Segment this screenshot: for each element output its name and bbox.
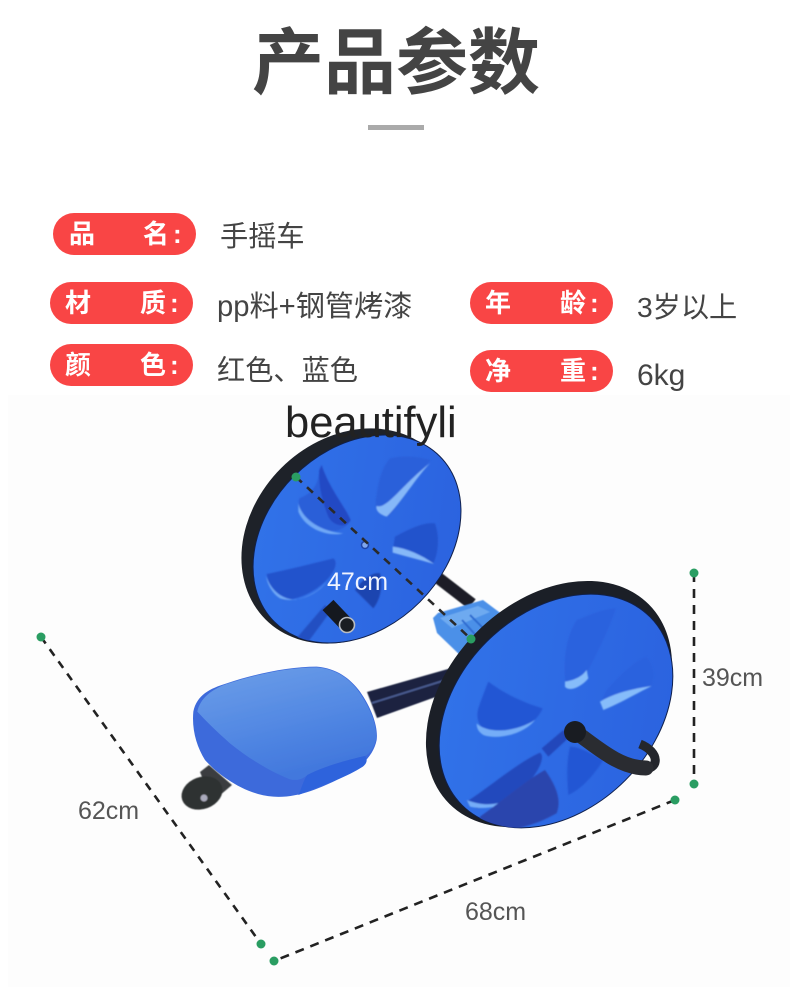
value: age: 3岁以上 xyxy=(637,291,737,323)
value: material: pp料+钢管烤漆 xyxy=(217,291,412,323)
dimension label: 47cm: 47cm xyxy=(327,568,388,596)
label pill: age xyxy=(470,282,613,324)
label pill: colour: : xyxy=(170,350,179,380)
watermark brand text: beautifyli xyxy=(285,399,457,447)
label pill: product name xyxy=(53,213,196,255)
axle and frame bars xyxy=(367,577,472,718)
label pill: material: : xyxy=(170,288,179,318)
value: product name: 手摇车 xyxy=(220,220,305,252)
seat top surface xyxy=(197,667,376,780)
seat front lip xyxy=(298,756,367,795)
label pill: net weight: 净 xyxy=(485,356,511,386)
title underline bar xyxy=(368,125,424,130)
label pill: net weight: : xyxy=(590,356,599,386)
label pill: colour xyxy=(50,344,193,386)
dimension line: width xyxy=(270,796,680,966)
seat body xyxy=(193,667,377,797)
wheel rim xyxy=(198,385,500,687)
crank stub on rear wheel xyxy=(328,605,354,632)
front wheel xyxy=(426,581,674,828)
wheel face xyxy=(393,548,719,874)
title: 产品参数 xyxy=(252,24,540,104)
rear caster wheel xyxy=(177,765,232,815)
hand crank xyxy=(564,721,655,769)
wheel recesses xyxy=(266,457,438,642)
hub xyxy=(362,542,368,548)
label pill: age: 龄 xyxy=(560,288,586,318)
footrest pedal xyxy=(433,600,503,658)
dimension label: 62cm: 62cm xyxy=(78,797,139,825)
value: net weight: 6kg xyxy=(637,359,685,392)
dimension line: height xyxy=(690,568,698,788)
photo background panel xyxy=(8,395,790,987)
label pill: material: 材 xyxy=(65,288,91,318)
dimension label: 39cm: 39cm xyxy=(702,664,763,692)
label pill: net weight xyxy=(470,350,613,392)
dimension line: wheel diameter xyxy=(292,472,476,644)
label pill: colour: 色 xyxy=(140,350,166,380)
product illustration: hand-cranked cart xyxy=(36,428,698,966)
wheel face xyxy=(211,393,503,685)
label pill: product name: 名 xyxy=(143,219,169,249)
wheel rim xyxy=(377,532,721,876)
label pill: material: 质 xyxy=(140,288,166,318)
label pill: colour: 颜 xyxy=(65,350,91,380)
wheel recesses xyxy=(467,608,654,832)
dimension label: 68cm: 68cm xyxy=(465,898,526,926)
dimension line: length xyxy=(36,632,266,948)
seat xyxy=(193,667,377,797)
label pill: material xyxy=(50,282,193,324)
value: colour: 红色、蓝色 xyxy=(217,354,358,386)
label pill: product name: 品 xyxy=(69,219,95,249)
label pill: product name: : xyxy=(173,219,182,249)
label pill: age: 年 xyxy=(485,288,511,318)
label pill: age: : xyxy=(590,288,599,318)
label pill: net weight: 重 xyxy=(560,356,586,386)
rear wheel xyxy=(241,428,462,644)
